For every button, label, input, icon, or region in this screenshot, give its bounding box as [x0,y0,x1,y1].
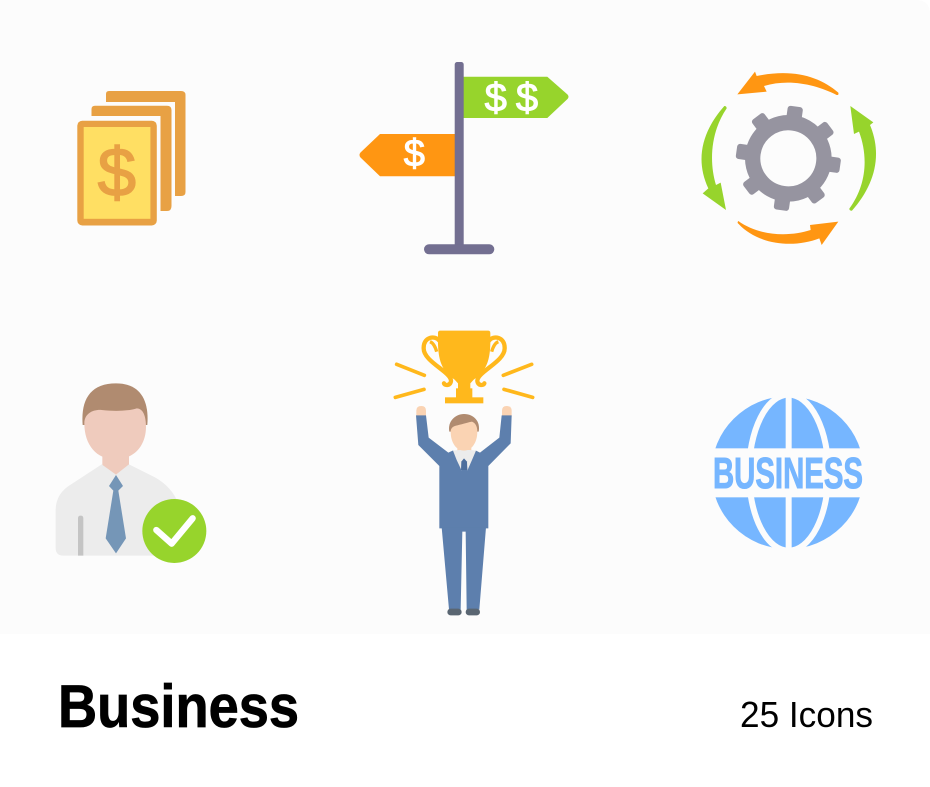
neck [102,450,129,475]
icon: approved businessman [56,383,206,563]
green sign pointing right [463,76,568,120]
arrow: bottom orange [738,221,838,245]
check badge [142,499,206,563]
shoes [447,609,480,615]
title: Business [58,673,299,740]
orange sign pointing left [360,133,456,176]
green sign pointing right: $ [516,76,538,120]
shirt pocket line [78,516,83,556]
face [451,422,477,451]
suit jacket [416,415,512,528]
icon count: 25 Icons [740,694,873,735]
tie [461,458,467,470]
green sign pointing right: $ [485,76,507,120]
icon: business globe [707,393,870,552]
orange sign pointing left: $ [404,133,425,175]
post base [424,244,494,254]
icon: stack of money cards [77,91,186,226]
globe [711,396,864,549]
hands [416,406,512,417]
equator band [707,448,870,497]
icon: man raising trophy [395,331,533,615]
arrow: top orange [737,72,838,95]
shirt [56,464,178,556]
hair [449,414,479,432]
trousers [442,527,486,609]
shirt collar [453,450,476,471]
hair [82,383,148,425]
necktie [106,475,126,553]
gear [729,99,847,217]
meridians [749,393,828,552]
globe word: BUSINESS [713,450,863,498]
face [84,408,146,459]
icon: stack of money cards: $ [98,134,136,211]
trophy [424,331,505,403]
arrow: right green [849,106,876,211]
icon: signpost with dollar signs [360,62,568,254]
neck [457,443,471,453]
arrow: left green [702,106,727,210]
post [455,62,464,248]
icon: gear with rotating arrows [702,72,876,245]
shine rays [395,364,533,397]
